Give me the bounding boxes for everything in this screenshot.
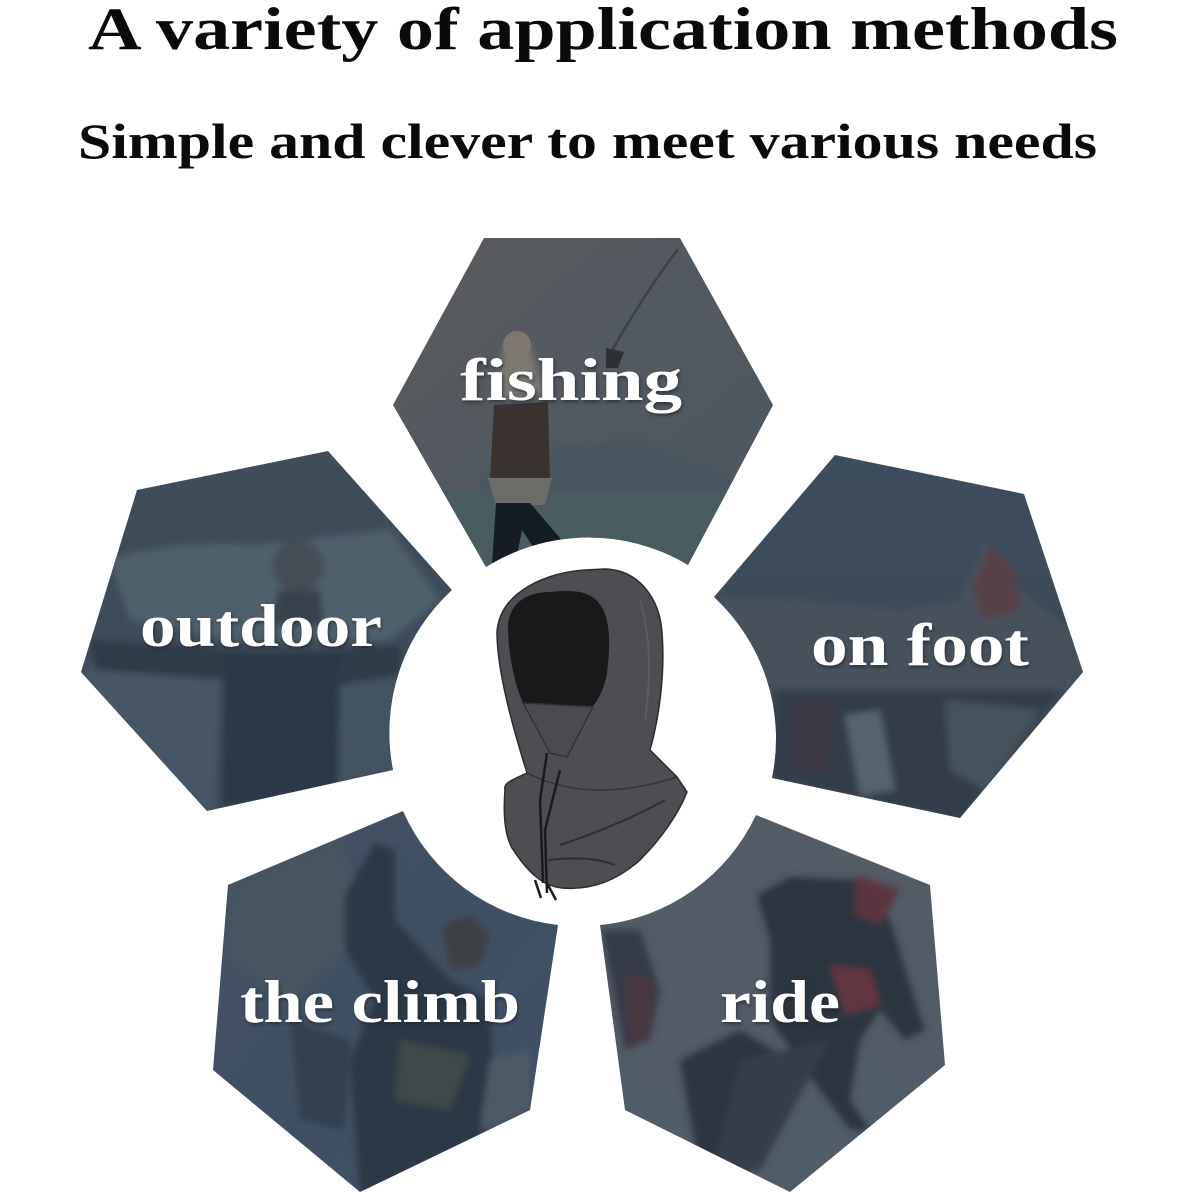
panel: fishing (390, 235, 780, 570)
label: fishing: fishing (460, 347, 682, 413)
label: on foot: on foot (811, 612, 1029, 678)
subtitle: Simple and clever to meet various needs (78, 113, 1097, 169)
panel: on foot (710, 450, 1090, 822)
product: grey fleece balaclava hood (497, 569, 687, 900)
panel: the climb (210, 808, 562, 1196)
panel: outdoor (78, 448, 458, 813)
label: outdoor: outdoor (140, 593, 382, 659)
panel: ride (596, 812, 948, 1196)
label: the climb: the climb (240, 969, 520, 1035)
label: ride: ride (720, 969, 840, 1035)
